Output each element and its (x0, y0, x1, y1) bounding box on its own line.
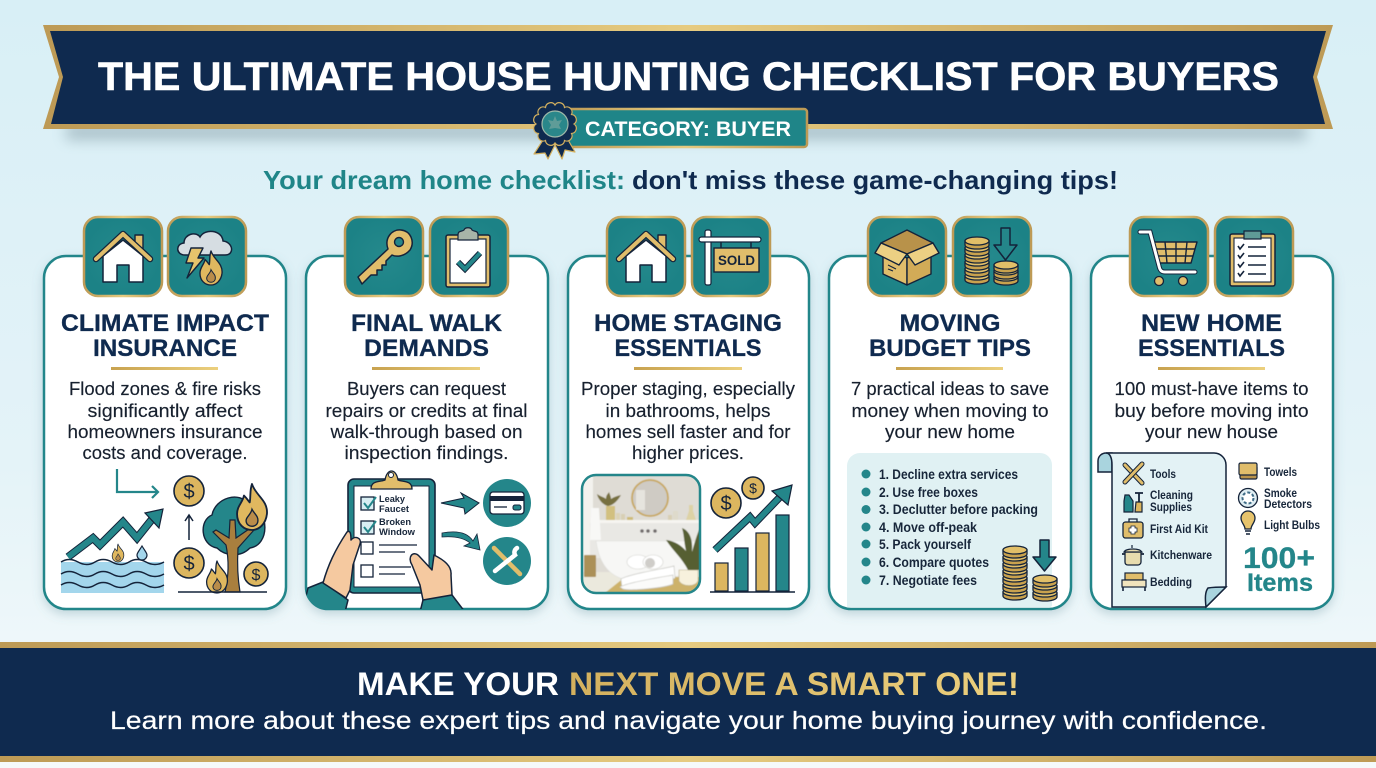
icon: storm and fire (168, 217, 246, 296)
icon: tools (1125, 464, 1142, 483)
callout: 100+ items: 100+ (1243, 542, 1315, 575)
description: homeowners insurance (68, 422, 262, 442)
icon: award ribbon seal (534, 103, 576, 159)
item labels left: Bedding (1150, 577, 1192, 589)
footer message: Learn more about these expert tips and navigate your home buying journey with confidence. (110, 707, 1267, 735)
icon: cleaning supplies (1124, 493, 1143, 512)
illustration: burning tree and rising cost (174, 476, 268, 593)
description: costs and coverage. (82, 443, 248, 463)
icon: elbow arrow (117, 469, 158, 498)
description: inspection findings. (344, 443, 508, 463)
description: 7 practical ideas to save (851, 379, 1049, 399)
illustration: inspection clipboard in hands (302, 471, 465, 612)
list text: 2. Use free boxes (879, 485, 978, 500)
list text: 1. Decline extra services (879, 467, 1018, 482)
item labels left: Supplies (1150, 502, 1192, 514)
icon: smoke detector (1238, 488, 1258, 508)
chart: rising prices: $ (720, 493, 732, 515)
heading: INSURANCE (93, 335, 237, 362)
heading: FINAL WALK (351, 310, 503, 337)
list text: 5. Pack yourself (879, 537, 971, 552)
panel: climate impact insurance (44, 217, 286, 609)
item labels left: First Aid Kit (1150, 524, 1208, 536)
item labels left: Cleaning (1150, 490, 1193, 502)
description: repairs or credits at final (326, 401, 528, 421)
heading: BUDGET TIPS (869, 335, 1031, 362)
list text: 3. Declutter before packing (879, 502, 1038, 517)
category label: CATEGORY: BUYER (585, 118, 791, 141)
icon: kitchen pot (1122, 545, 1144, 565)
heading: ESSENTIALS (614, 335, 762, 362)
description: significantly affect (88, 401, 242, 421)
subtitle: Your dream home checklist: (263, 165, 625, 195)
photo: staged bathroom (582, 475, 700, 593)
description: your new house (1145, 422, 1278, 442)
illustration: burning tree and rising cost: $ (183, 481, 195, 503)
icon: house (84, 217, 162, 296)
description: your new home (885, 422, 1015, 442)
chart: rising prices (710, 477, 795, 592)
panel: moving budget tips (829, 217, 1071, 609)
heading: DEMANDS (364, 335, 489, 362)
description: 100 must-have items to (1114, 379, 1308, 399)
panel: final walk demands (302, 217, 548, 612)
description: walk-through based on (329, 422, 522, 442)
list text: 7. Negotiate fees (879, 573, 977, 588)
sold label: SOLD (718, 252, 755, 268)
checklist labels: Leaky (379, 494, 406, 505)
heading: ESSENTIALS (1138, 335, 1285, 362)
illustration: burning tree and rising cost: $ (183, 553, 195, 575)
description: Buyers can request (347, 379, 506, 399)
checklist scroll (1098, 453, 1226, 607)
icon: clipboard check (430, 217, 508, 296)
description: homes sell faster and for (586, 422, 790, 442)
item labels left: Tools (1150, 469, 1176, 481)
tips list panel (847, 453, 1057, 607)
icon: coins and down arrow (953, 217, 1031, 296)
panel: new home essentials (1091, 217, 1333, 609)
icon: arrow to credit card (441, 493, 479, 514)
description: Proper staging, especially (581, 379, 795, 399)
icon: bed (1122, 573, 1146, 591)
icon: credit card (483, 479, 531, 527)
item labels right: Detectors (1264, 499, 1312, 511)
icon: key (345, 217, 423, 296)
checklist labels: Window (379, 527, 416, 538)
description: in bathrooms, helps (606, 401, 770, 421)
list text: 4. Move off-peak (879, 520, 977, 535)
list text: 6. Compare quotes (879, 555, 989, 570)
checklist labels: Faucet (379, 504, 410, 515)
description: money when moving to (852, 401, 1048, 421)
footer banner (0, 642, 1376, 762)
subtitle: don't miss these game-changing tips! (632, 165, 1118, 195)
callout: 100+ items: Items (1247, 569, 1313, 597)
icon: house (607, 217, 685, 296)
footer headline: NEXT MOVE A SMART ONE! (569, 666, 1019, 702)
title banner (43, 25, 1333, 140)
icon: sold sign (692, 217, 770, 296)
icon: towels (1239, 463, 1257, 479)
icon: shopping cart (1130, 217, 1208, 296)
heading: NEW HOME (1141, 310, 1282, 337)
item labels left: Kitchenware (1150, 550, 1212, 562)
icon: moving box (868, 217, 946, 296)
icon: light bulb (1241, 511, 1255, 534)
category badge (562, 109, 807, 147)
title text: THE ULTIMATE HOUSE HUNTING CHECKLIST FOR BUYERS (98, 55, 1279, 99)
item labels right: Towels (1264, 467, 1297, 479)
icon: checklist (1215, 217, 1293, 296)
icon: repair tools (483, 537, 531, 585)
heading: MOVING (900, 310, 1000, 337)
description: higher prices. (632, 443, 744, 463)
chart: rising prices: $ (749, 480, 757, 496)
heading: CLIMATE IMPACT (61, 310, 269, 337)
illustration: flood and rising chart (61, 509, 164, 593)
item labels right: Light Bulbs (1264, 520, 1320, 532)
panel: home staging essentials (568, 217, 809, 609)
list bullets (862, 470, 870, 584)
item labels right: Smoke (1264, 488, 1297, 500)
icon: arrow to tools (442, 532, 480, 550)
icon: first aid kit (1123, 519, 1143, 538)
icon: coins and down arrow (1003, 540, 1057, 601)
description: buy before moving into (1114, 401, 1308, 421)
heading: HOME STAGING (594, 310, 782, 337)
illustration: burning tree and rising cost: $ (252, 567, 261, 584)
footer headline: MAKE YOUR (357, 666, 559, 702)
description: Flood zones & fire risks (69, 379, 261, 399)
checklist labels: Broken (379, 517, 411, 528)
